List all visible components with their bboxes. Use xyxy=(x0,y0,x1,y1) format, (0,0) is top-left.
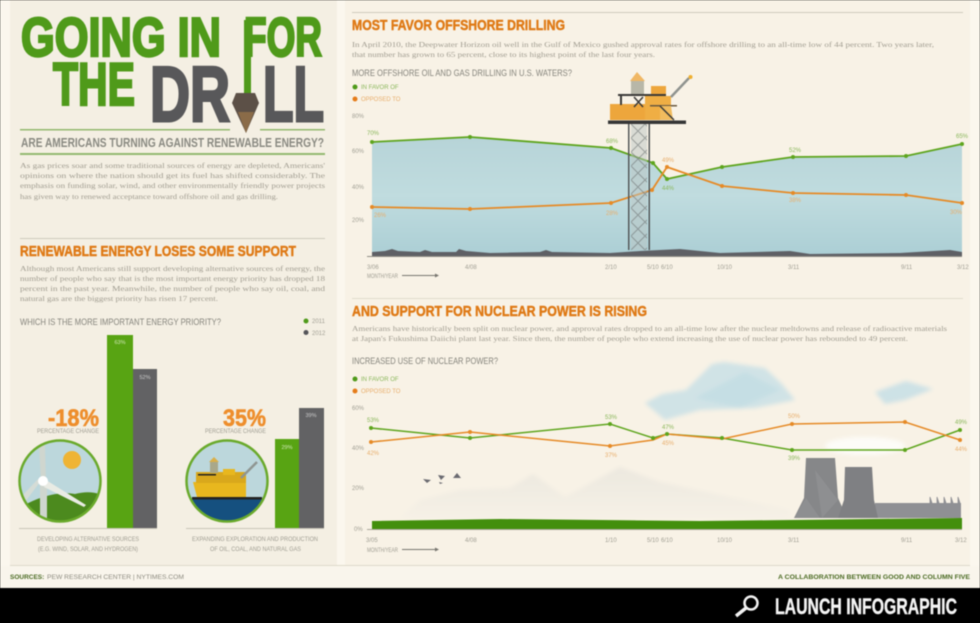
bar chart: energy priority: DEVELOPING ALTERNATIVE SOURCES xyxy=(37,537,139,543)
offshore drilling text xyxy=(352,40,934,59)
line chart: nuclear power: 47% xyxy=(662,425,675,431)
footer: sources: SOURCES: xyxy=(10,574,44,581)
line chart: nuclear power: 4/08 xyxy=(465,538,477,544)
line chart: offshore drilling: 65% xyxy=(956,134,969,140)
bar chart: energy priority: 2011 xyxy=(312,319,326,325)
line chart: offshore drilling: IN FAVOR OF xyxy=(361,85,399,91)
illustration: nuclear plant xyxy=(794,458,961,518)
line chart: nuclear power: 3/05 xyxy=(366,538,378,544)
heading: renewable energy: RENEWABLE ENERGY LOSES SOME SUPPORT xyxy=(20,243,296,260)
line chart: offshore drilling: 26% xyxy=(374,213,387,219)
bar chart: energy priority: WHICH IS THE MORE IMPORTANT ENERGY PRIORITY? xyxy=(20,317,221,328)
line chart: nuclear power: 39% xyxy=(788,456,801,462)
line chart: nuclear power: IN FAVOR OF xyxy=(361,377,399,383)
line chart: offshore drilling: 38% xyxy=(789,198,802,204)
line chart: nuclear power: 50% xyxy=(788,414,801,420)
line chart: nuclear power: 1/10 xyxy=(605,538,617,544)
line chart: nuclear power: 9/11 xyxy=(901,538,913,544)
line chart: offshore drilling: 52% xyxy=(789,148,802,154)
bar chart: energy priority: 39% xyxy=(305,413,317,419)
line chart: offshore drilling: 5/10 xyxy=(647,265,659,271)
line chart: offshore drilling: 60% xyxy=(352,149,365,155)
icon: wind turbine xyxy=(19,440,102,526)
line chart: offshore drilling: 4/08 xyxy=(465,265,477,271)
title: THE xyxy=(53,51,135,118)
line chart: offshore drilling xyxy=(352,68,969,280)
line chart: nuclear power: 6/10 xyxy=(661,538,673,544)
title xyxy=(21,6,324,138)
line chart: offshore drilling: 40% xyxy=(352,185,365,191)
line chart: nuclear power: 3/12 xyxy=(955,538,967,544)
illustration: steam xyxy=(825,437,905,455)
nuclear power text: Americans have historically been split on nuclear power, and approval rates dropped to an all-time low after the nuclear meltdowns and release of radioactive materials xyxy=(352,324,947,333)
subtitle: ARE AMERICANS TURNING AGAINST RENEWABLE ENERGY? xyxy=(21,135,324,150)
line chart: offshore drilling: 70% xyxy=(367,131,380,137)
line chart: offshore drilling: MORE OFFSHORE OIL AND GAS DRILLING IN U.S. WATERS? xyxy=(352,68,572,79)
line chart: offshore drilling: 9/11 xyxy=(901,265,913,271)
nuclear power text: at Japan's Fukushima Daiichi plant last year. Since then, the number of people who extend increasing the use of nuclear power has rebounded to 49 percent. xyxy=(352,334,908,343)
heading: nuclear power: AND SUPPORT FOR NUCLEAR POWER IS RISING xyxy=(352,303,647,320)
title: DR xyxy=(150,50,230,138)
icon: drill bit xyxy=(232,20,259,133)
footer: sources: PEW RESEARCH CENTER | NYTIMES.COM xyxy=(47,574,184,581)
icon: magnifying glass xyxy=(736,596,758,616)
title: LL xyxy=(263,50,324,138)
line chart: nuclear power: 53% xyxy=(605,415,618,421)
line chart: nuclear power: 45% xyxy=(662,441,675,447)
line chart: offshore drilling: 10/10 xyxy=(717,265,733,271)
bar chart: energy priority: OF OIL, COAL, AND NATURAL GAS xyxy=(210,547,301,553)
line chart: offshore drilling: 3/06 xyxy=(367,265,379,271)
renewable energy text xyxy=(20,264,326,303)
renewable energy text: natural gas are the biggest priority has risen 17 percent. xyxy=(20,294,218,303)
intro text: As gas prices soar and some traditional sources of energy are depleted, Americans' xyxy=(20,161,326,170)
renewable energy text: percent in the past year. Meanwhile, the number of people who say oil, coal, and xyxy=(20,284,325,293)
renewable energy text: number of people who say that is the most important energy priority has dropped 18 xyxy=(20,274,325,283)
line chart: offshore drilling: 6/10 xyxy=(661,265,673,271)
bar chart: energy priority: EXPANDING EXPLORATION AND PRODUCTION xyxy=(192,537,318,543)
offshore drilling text: that number has grown to 65 percent, close to its highest point of the last four years. xyxy=(352,50,655,59)
offshore drilling text: In April 2010, the Deepwater Horizon oil well in the Gulf of Mexico gushed approval rates for offshore drilling to an all-time low of 44 percent. Two years later, xyxy=(352,40,934,49)
intro text: has given way to renewed acceptance toward offshore oil and gas drilling. xyxy=(20,192,278,201)
line chart: nuclear power xyxy=(352,356,968,554)
bar chart: energy priority: PERCENTAGE CHANGE xyxy=(37,429,99,435)
line chart: nuclear power: 49% xyxy=(955,420,968,426)
heading: offshore drilling: MOST FAVOR OFFSHORE DRILLING xyxy=(352,17,565,34)
nuclear power text xyxy=(352,324,947,343)
line chart: offshore drilling: 44% xyxy=(662,186,675,192)
line chart: nuclear power: 44% xyxy=(955,447,968,453)
line chart: offshore drilling: 3/12 xyxy=(957,265,969,271)
bar chart: energy priority: 2012 xyxy=(312,331,326,337)
intro text: emphasis on funding solar, wind, and other environmentally friendly power projects xyxy=(20,181,325,190)
bar chart: energy priority: PERCENTAGE CHANGE xyxy=(205,429,266,435)
line chart: offshore drilling: 49% xyxy=(662,158,675,164)
bar chart: energy priority: 63% xyxy=(114,340,126,346)
bar chart: energy priority: 52% xyxy=(139,375,151,381)
footer: collaboration credit: A COLLABORATION BETWEEN GOOD AND COLUMN FIVE xyxy=(778,574,971,581)
line chart: offshore drilling: MONTH/YEAR xyxy=(367,274,399,280)
line chart: nuclear power: 20% xyxy=(352,486,365,492)
line chart: nuclear power: INCREASED USE OF NUCLEAR POWER? xyxy=(352,356,498,367)
bar chart: energy priority xyxy=(19,317,326,553)
title: FOR xyxy=(244,6,322,68)
line chart: nuclear power: 53% xyxy=(367,418,380,424)
illustration: clouds xyxy=(645,362,933,420)
line chart: nuclear power: 40% xyxy=(352,446,365,452)
line chart: offshore drilling: 28% xyxy=(606,211,619,217)
illustration: birds xyxy=(423,473,461,484)
line chart: nuclear power: 0% xyxy=(354,527,363,533)
bar chart: energy priority: -18% xyxy=(48,405,99,432)
line chart: offshore drilling: OPPOSED TO xyxy=(361,97,401,103)
icon: oil platform xyxy=(186,440,268,523)
launch bar xyxy=(0,588,980,623)
line chart: nuclear power: MONTH/YEAR xyxy=(367,548,399,554)
line chart: offshore drilling: 68% xyxy=(606,139,619,145)
intro text: opinions on where the nation should get its fuel has shifted considerably. The xyxy=(20,171,326,180)
renewable energy text: Although most Americans still support developing alternative sources of energy, the xyxy=(20,264,326,273)
line chart: nuclear power: 42% xyxy=(367,451,380,457)
line chart: offshore drilling: 2/10 xyxy=(605,265,617,271)
line chart: offshore drilling: 80% xyxy=(352,114,365,120)
bar chart: energy priority: 35% xyxy=(223,405,266,432)
line chart: offshore drilling: 30% xyxy=(950,210,963,216)
line chart: nuclear power: 60% xyxy=(352,406,365,412)
line chart: nuclear power: 10/10 xyxy=(717,538,733,544)
intro text xyxy=(20,161,326,201)
icon: oil rig tower xyxy=(608,72,692,250)
line chart: nuclear power: 5/10 xyxy=(647,538,659,544)
title: GOING IN xyxy=(21,6,221,68)
line chart: offshore drilling: 20% xyxy=(352,218,365,224)
line chart: nuclear power: 37% xyxy=(605,453,618,459)
illustration: mountains xyxy=(400,467,790,518)
bar chart: energy priority: 29% xyxy=(281,445,293,451)
line chart: offshore drilling: 3/11 xyxy=(788,265,800,271)
bar chart: energy priority: (E.G. WIND, SOLAR, AND HYDROGEN) xyxy=(38,547,138,553)
line chart: nuclear power: 3/11 xyxy=(788,538,800,544)
line chart: nuclear power: OPPOSED TO xyxy=(361,389,401,395)
